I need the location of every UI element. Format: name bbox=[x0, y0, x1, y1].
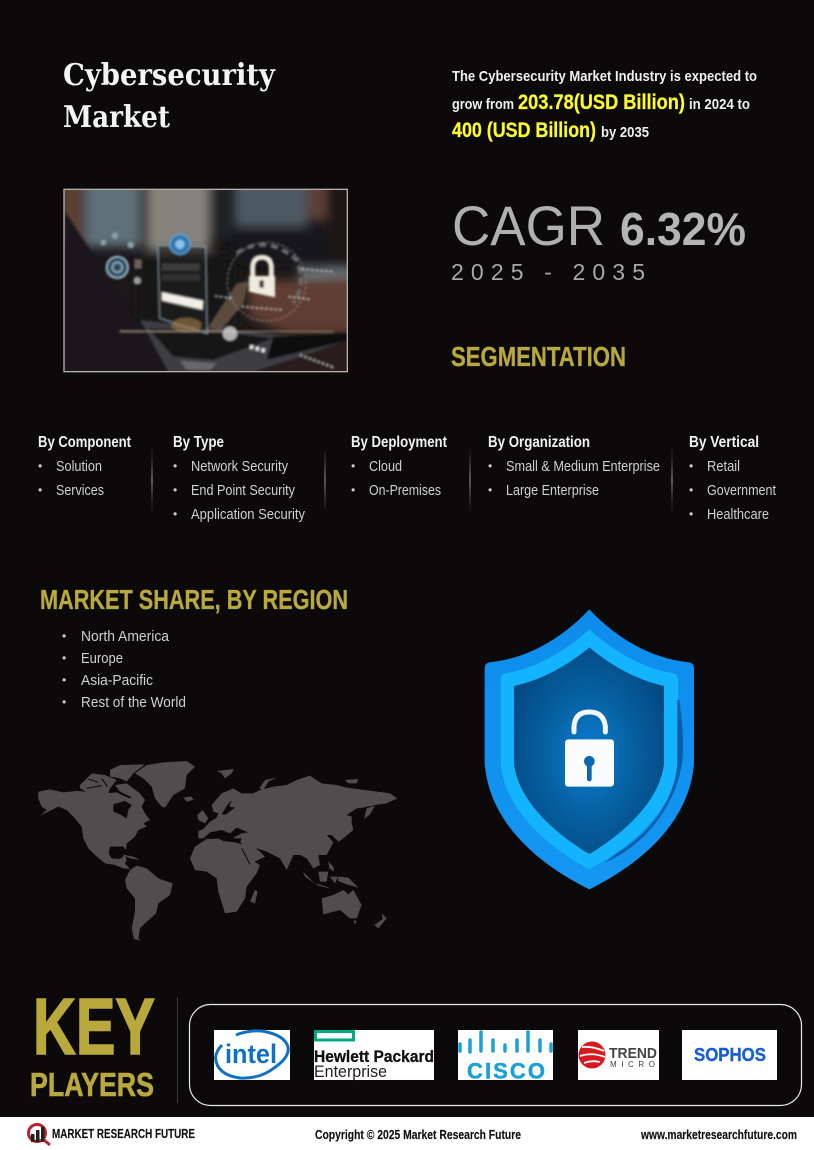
column: by vertical: By Vertical bbox=[689, 434, 759, 451]
column: by organization: • bbox=[488, 483, 492, 497]
title bbox=[63, 57, 276, 134]
logo: cisco: CISCO bbox=[467, 1058, 545, 1084]
column: by component: • bbox=[38, 459, 42, 473]
column: by type: • bbox=[173, 459, 177, 473]
heading: key players bbox=[30, 982, 155, 1103]
column: by type: Network Security bbox=[191, 459, 289, 475]
column: by vertical: Government bbox=[707, 483, 776, 499]
logo: sophos: SOPHOS bbox=[694, 1045, 766, 1065]
title: Market bbox=[63, 99, 170, 134]
region list: Rest of the World bbox=[81, 695, 186, 711]
CAGR: 6.32% bbox=[620, 203, 746, 255]
column: by type bbox=[173, 434, 306, 523]
footer bbox=[0, 1117, 814, 1150]
column: by deployment: By Deployment bbox=[351, 434, 448, 451]
logo: hewlett packard enterprise bbox=[314, 1030, 434, 1081]
fingerprint circle bbox=[100, 232, 142, 285]
photo: laptop with security overlay bbox=[63, 188, 348, 372]
CAGR: CAGR bbox=[452, 194, 605, 257]
region list: • bbox=[62, 673, 66, 687]
shield middle bbox=[501, 629, 678, 869]
americas and greenland bbox=[38, 761, 195, 941]
column: by component: • bbox=[38, 483, 42, 497]
shield icon bbox=[485, 609, 694, 889]
logo: intel: intel bbox=[225, 1039, 277, 1069]
padlock bbox=[249, 257, 275, 297]
column: by vertical bbox=[689, 434, 776, 523]
logo: sophos bbox=[682, 1030, 777, 1080]
region list: • bbox=[62, 695, 66, 709]
column: by vertical: Healthcare bbox=[707, 507, 769, 523]
copyright: Copyright © 2025 Market Research Future bbox=[315, 1128, 521, 1142]
login panel bbox=[158, 245, 207, 333]
logo: hewlett packard enterprise: Enterprise bbox=[314, 1062, 387, 1081]
column: by component: Services bbox=[56, 483, 104, 499]
column: by organization: • bbox=[488, 459, 492, 473]
heading: key players: KEY bbox=[33, 982, 155, 1071]
market forecast text: by 2035 bbox=[601, 124, 649, 141]
heading: segmentation: SEGMENTATION bbox=[451, 341, 626, 372]
region list: Asia-Pacific bbox=[81, 673, 153, 689]
market forecast text: grow from bbox=[452, 96, 514, 113]
column: by vertical: • bbox=[689, 483, 693, 497]
globe bbox=[215, 242, 333, 321]
column: by organization: Small & Medium Enterprise bbox=[506, 459, 660, 475]
footer logo icon bbox=[28, 1124, 50, 1145]
heading: key players: PLAYERS bbox=[30, 1066, 154, 1103]
column: by component bbox=[38, 434, 132, 499]
key players panel bbox=[190, 1004, 802, 1106]
column: by deployment: Cloud bbox=[369, 459, 402, 475]
footer brand: MARKET RESEARCH FUTURE bbox=[52, 1127, 195, 1141]
logo: trend micro bbox=[578, 1030, 659, 1080]
logo: trend micro: MICRO bbox=[610, 1060, 655, 1069]
column: by vertical: • bbox=[689, 507, 693, 521]
column: by organization bbox=[488, 434, 660, 499]
column: by organization: Large Enterprise bbox=[506, 483, 599, 499]
CAGR bbox=[451, 194, 746, 285]
logo: trend micro: TREND bbox=[609, 1045, 657, 1062]
shield inner bbox=[514, 647, 664, 854]
hand finger bbox=[208, 282, 248, 332]
CAGR: 2025 - 2035 bbox=[451, 259, 645, 285]
region list: • bbox=[62, 629, 66, 643]
shield shadow bbox=[605, 700, 683, 862]
market forecast text: The Cybersecurity Market Industry is expected to bbox=[452, 68, 757, 85]
column: by deployment bbox=[351, 434, 448, 499]
column: by organization: By Organization bbox=[488, 434, 590, 451]
column: by type: • bbox=[173, 507, 177, 521]
column: by type: By Type bbox=[173, 434, 224, 451]
column: by vertical: • bbox=[689, 459, 693, 473]
logo: hewlett packard enterprise: Hewlett Packard bbox=[314, 1048, 434, 1066]
market forecast text: 400 (USD Billion) bbox=[452, 119, 596, 142]
market forecast text: 203.78(USD Billion) bbox=[518, 91, 685, 114]
region list: • bbox=[62, 651, 66, 665]
glow node bbox=[170, 234, 190, 254]
eurasia africa oceania bbox=[190, 769, 397, 928]
region list: Europe bbox=[81, 651, 123, 667]
market forecast text bbox=[452, 68, 757, 142]
region list bbox=[62, 629, 186, 711]
logo: intel bbox=[214, 1030, 290, 1080]
region list: North America bbox=[81, 629, 170, 645]
column: by type: • bbox=[173, 483, 177, 497]
column: by component: By Component bbox=[38, 434, 132, 451]
world map bbox=[38, 761, 397, 941]
column: by type: End Point Security bbox=[191, 483, 296, 499]
column: by type: Application Security bbox=[191, 507, 306, 523]
logo: cisco bbox=[458, 1030, 553, 1084]
market forecast text: in 2024 to bbox=[689, 96, 750, 113]
column: by vertical: Retail bbox=[707, 459, 740, 475]
padlock bbox=[565, 712, 614, 787]
laptop screen bbox=[64, 212, 148, 371]
shield outer bbox=[485, 609, 694, 889]
column: by deployment: • bbox=[351, 459, 355, 473]
column: by component: Solution bbox=[56, 459, 102, 475]
column: by deployment: On-Premises bbox=[369, 483, 441, 499]
title: Cybersecurity bbox=[63, 57, 276, 92]
heading: market share by region: MARKET SHARE, BY REGION bbox=[40, 584, 348, 615]
column: by deployment: • bbox=[351, 483, 355, 497]
keyboard bbox=[140, 320, 347, 372]
segmentation columns bbox=[38, 434, 776, 523]
